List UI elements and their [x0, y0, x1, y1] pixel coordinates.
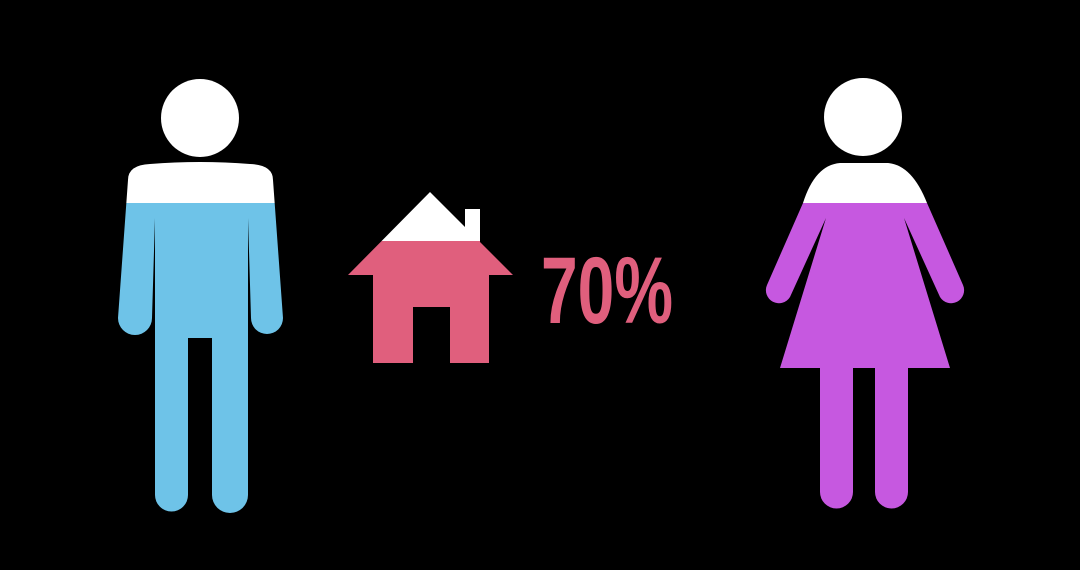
woman head: [824, 78, 902, 156]
man head: [161, 79, 239, 157]
percentage label: 70%: [541, 238, 673, 344]
woman body: [766, 163, 964, 508]
man figure: [118, 79, 283, 513]
man body: [118, 162, 283, 513]
house icon: [348, 192, 513, 363]
woman figure: [766, 78, 964, 508]
